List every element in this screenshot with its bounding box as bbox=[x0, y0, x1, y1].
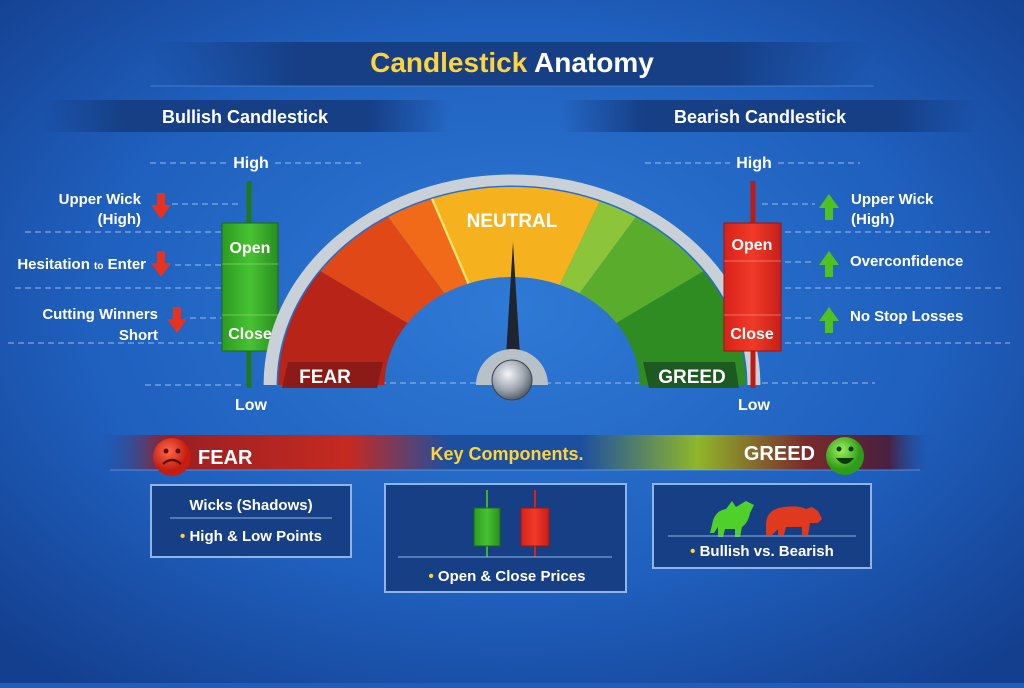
bullish labels: Cutting Winners bbox=[42, 306, 158, 323]
gauge label: neutral: NEUTRAL bbox=[467, 211, 558, 232]
title bbox=[150, 42, 874, 86]
icon: bull bbox=[710, 501, 754, 537]
panel: wicks: Wicks (Shadows) bbox=[189, 497, 313, 514]
bullish labels: Hesitation to Enter bbox=[17, 256, 146, 273]
panel: wicks: • High & Low Points bbox=[180, 528, 322, 545]
bearish labels: Upper Wick bbox=[851, 191, 934, 208]
fear/greed banner: GREED bbox=[744, 443, 815, 465]
bearish labels: (High) bbox=[851, 211, 894, 228]
panel: open close bbox=[385, 484, 626, 592]
heading: bearish bbox=[560, 100, 980, 132]
title: Candlestick Anatomy bbox=[370, 47, 654, 78]
bearish labels bbox=[850, 191, 963, 325]
bearish labels: No Stop Losses bbox=[850, 308, 963, 325]
fear/greed banner: Key Components. bbox=[430, 444, 584, 464]
bullish candlestick bbox=[222, 155, 278, 414]
panel: bull vs bear bbox=[653, 484, 871, 568]
needle bbox=[476, 242, 548, 400]
bearish candlestick: High bbox=[736, 155, 772, 172]
panel: bull vs bear: • Bullish vs. Bearish bbox=[690, 543, 834, 560]
icon: bear bbox=[766, 506, 822, 535]
heading: bearish: Bearish Candlestick bbox=[674, 107, 847, 127]
bullish labels: Short bbox=[119, 327, 158, 344]
bullish candlestick: Low bbox=[235, 397, 268, 414]
gauge label: greed bbox=[643, 362, 739, 388]
bullish candlestick: Open bbox=[230, 240, 270, 257]
bullish candlestick: Close bbox=[228, 326, 272, 343]
bearish candlestick bbox=[724, 155, 781, 414]
bearish labels: Overconfidence bbox=[850, 253, 963, 270]
fear/greed banner: FEAR bbox=[198, 447, 253, 469]
bullish labels: Upper Wick bbox=[59, 191, 142, 208]
panel: open close: • Open & Close Prices bbox=[429, 568, 585, 585]
fear/greed banner bbox=[100, 435, 930, 476]
gauge label: greed: GREED bbox=[658, 367, 726, 388]
gauge label: fear bbox=[282, 362, 383, 388]
heading: bullish: Bullish Candlestick bbox=[162, 107, 329, 127]
bearish candlestick: Open bbox=[732, 237, 772, 254]
bullish labels: (High) bbox=[98, 211, 141, 228]
gauge bbox=[270, 180, 754, 385]
icon: up arrows bbox=[819, 194, 839, 333]
heading: bullish bbox=[40, 100, 450, 132]
bullish labels bbox=[17, 191, 158, 344]
bullish candlestick: High bbox=[233, 155, 269, 172]
bearish candlestick: Low bbox=[738, 397, 771, 414]
bearish candlestick: Close bbox=[730, 326, 774, 343]
panel: wicks bbox=[151, 485, 351, 557]
icon: down arrows bbox=[151, 193, 187, 333]
gauge label: fear: FEAR bbox=[299, 367, 351, 388]
